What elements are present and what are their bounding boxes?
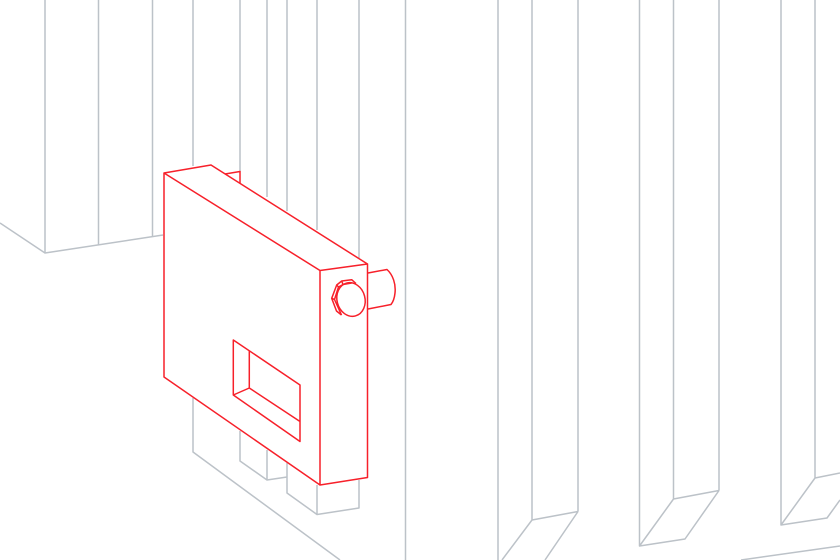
grey structure: feet below the box — [193, 398, 359, 560]
grey column two — [640, 0, 719, 546]
box body — [164, 165, 368, 485]
rectangular window — [233, 340, 300, 442]
grey column three — [781, 0, 840, 525]
red box assembly — [164, 165, 395, 485]
grey column one — [498, 0, 578, 560]
pin — [368, 270, 395, 309]
rear bracket — [225, 172, 240, 183]
grey structure: back wall with columns — [0, 0, 406, 560]
hex bolt — [332, 279, 369, 320]
grey floor line — [741, 546, 840, 560]
